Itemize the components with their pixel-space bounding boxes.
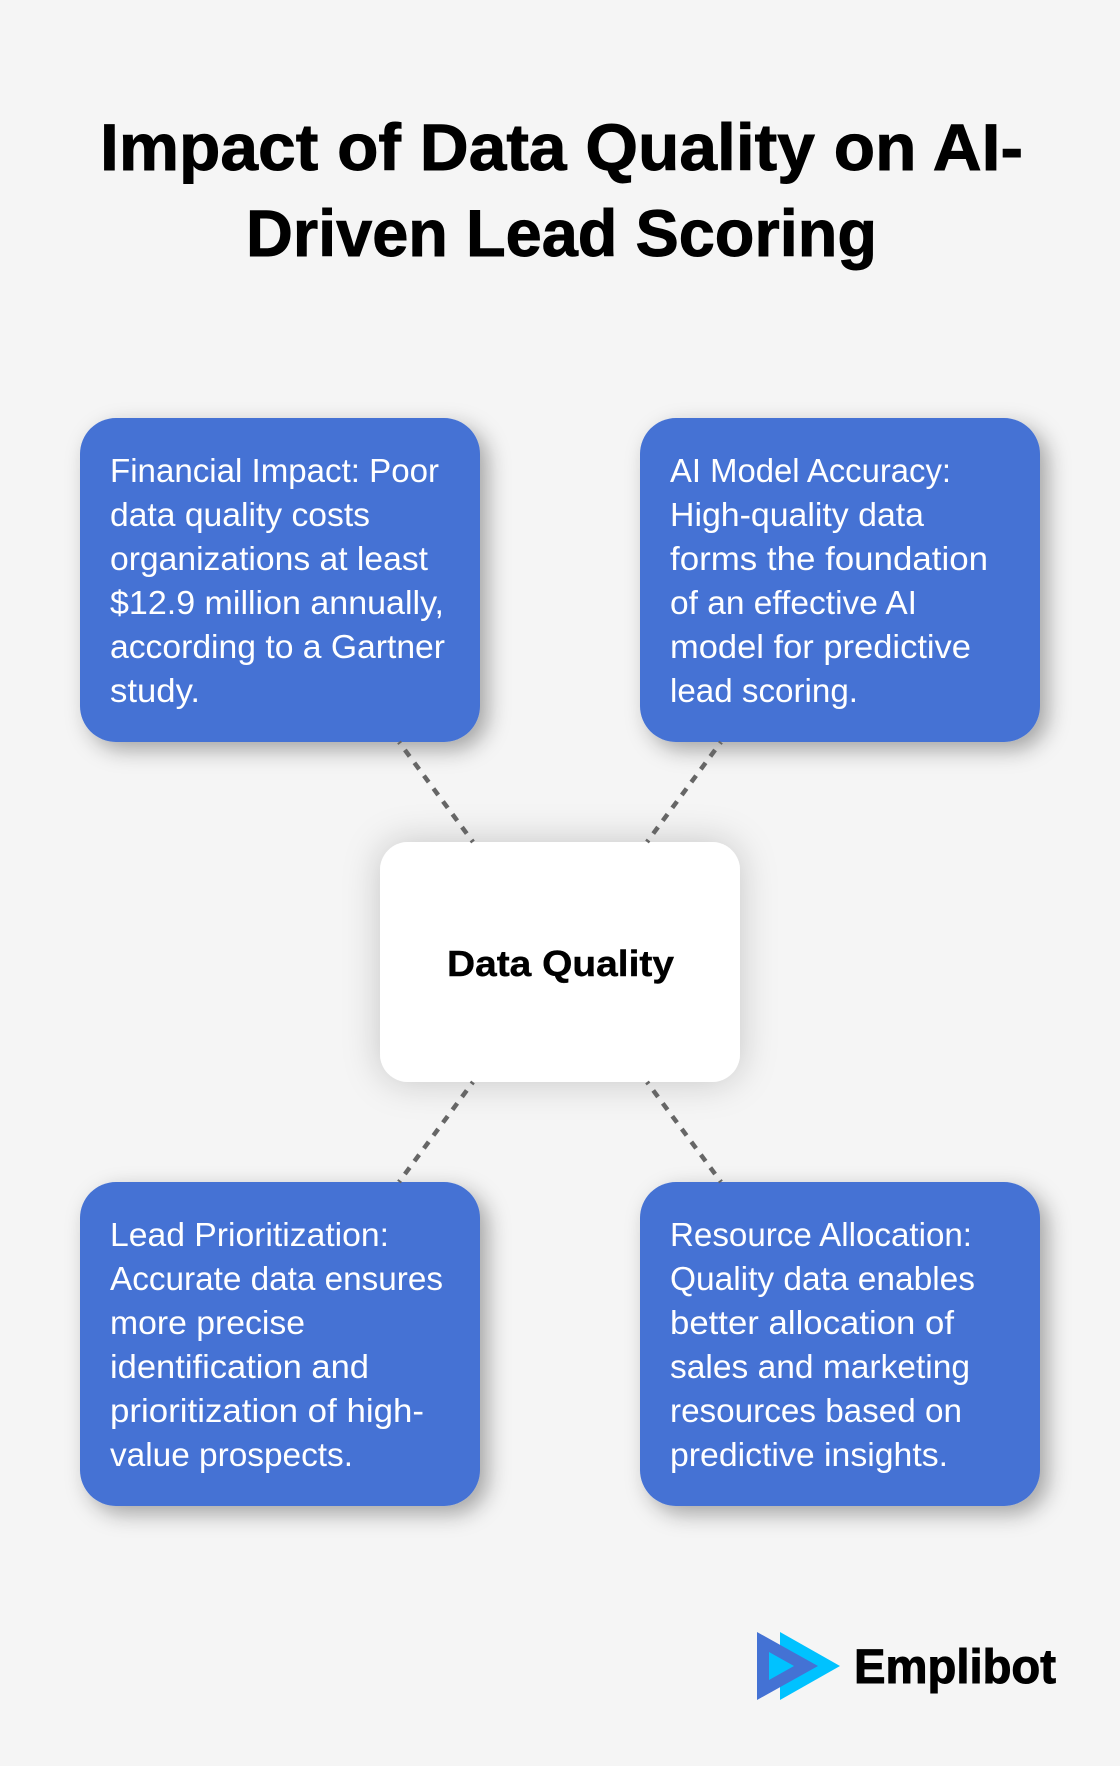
connector: data quality to resource allocation <box>647 1082 721 1182</box>
title <box>100 110 1023 270</box>
text: financial impact: $12.9 million annually, <box>110 584 444 621</box>
logo: Emplibot <box>757 1632 1056 1700</box>
text: lead prioritization: more precise <box>110 1304 305 1341</box>
card background: financial impact <box>80 418 480 742</box>
text: resource allocation: better allocation of <box>670 1304 955 1341</box>
text: resource allocation: sales and marketing <box>670 1348 970 1385</box>
text: resource allocation: Quality data enables <box>670 1260 975 1297</box>
text: financial impact: data quality costs <box>110 496 370 533</box>
text: financial impact: according to a Gartner <box>110 628 445 665</box>
text: resource allocation: resources based on <box>670 1392 962 1429</box>
text: lead prioritization: prioritization of high- <box>110 1392 424 1429</box>
text: financial impact: study. <box>110 672 200 709</box>
text: resource allocation: predictive insights. <box>670 1436 948 1473</box>
icon: play triangles <box>757 1632 840 1700</box>
card background: resource allocation <box>640 1182 1040 1506</box>
central node: data quality <box>380 842 740 1082</box>
connector: data quality to AI model accuracy <box>647 742 721 842</box>
text: lead prioritization: identification and <box>110 1348 369 1385</box>
text: financial impact: organizations at least <box>110 540 428 577</box>
text: AI model accuracy: forms the foundation <box>670 540 988 577</box>
connector: data quality to financial impact <box>399 742 473 842</box>
text: AI model accuracy: lead scoring. <box>670 672 858 709</box>
text: resource allocation: Resource Allocation: <box>670 1216 972 1253</box>
text: lead prioritization: Lead Prioritization: <box>110 1216 389 1253</box>
panel: lead prioritization <box>80 1182 480 1506</box>
title: Impact of Data Quality on AI- <box>100 110 1023 184</box>
wordmark: Emplibot <box>854 1641 1056 1694</box>
panel: resource allocation <box>640 1182 1040 1506</box>
text: lead prioritization <box>110 1216 443 1473</box>
label: data quality: Data Quality <box>447 943 674 984</box>
title: Driven Lead Scoring <box>246 196 877 270</box>
card background: data quality <box>380 842 740 1082</box>
text: lead prioritization: value prospects. <box>110 1436 353 1473</box>
text: lead prioritization: Accurate data ensures <box>110 1260 443 1297</box>
text: AI model accuracy: model for predictive <box>670 628 971 665</box>
card background: AI model accuracy <box>640 418 1040 742</box>
panel: AI model accuracy <box>640 418 1040 742</box>
text: AI model accuracy <box>670 452 988 709</box>
text: resource allocation <box>670 1216 975 1473</box>
text: financial impact: Financial Impact: Poor <box>110 452 439 489</box>
text: AI model accuracy: High-quality data <box>670 496 925 533</box>
text: AI model accuracy: AI Model Accuracy: <box>670 452 951 489</box>
text: financial impact <box>110 452 445 709</box>
card background: lead prioritization <box>80 1182 480 1506</box>
connector: data quality to lead prioritization <box>399 1082 473 1182</box>
panel: financial impact <box>80 418 480 742</box>
text: AI model accuracy: of an effective AI <box>670 584 917 621</box>
